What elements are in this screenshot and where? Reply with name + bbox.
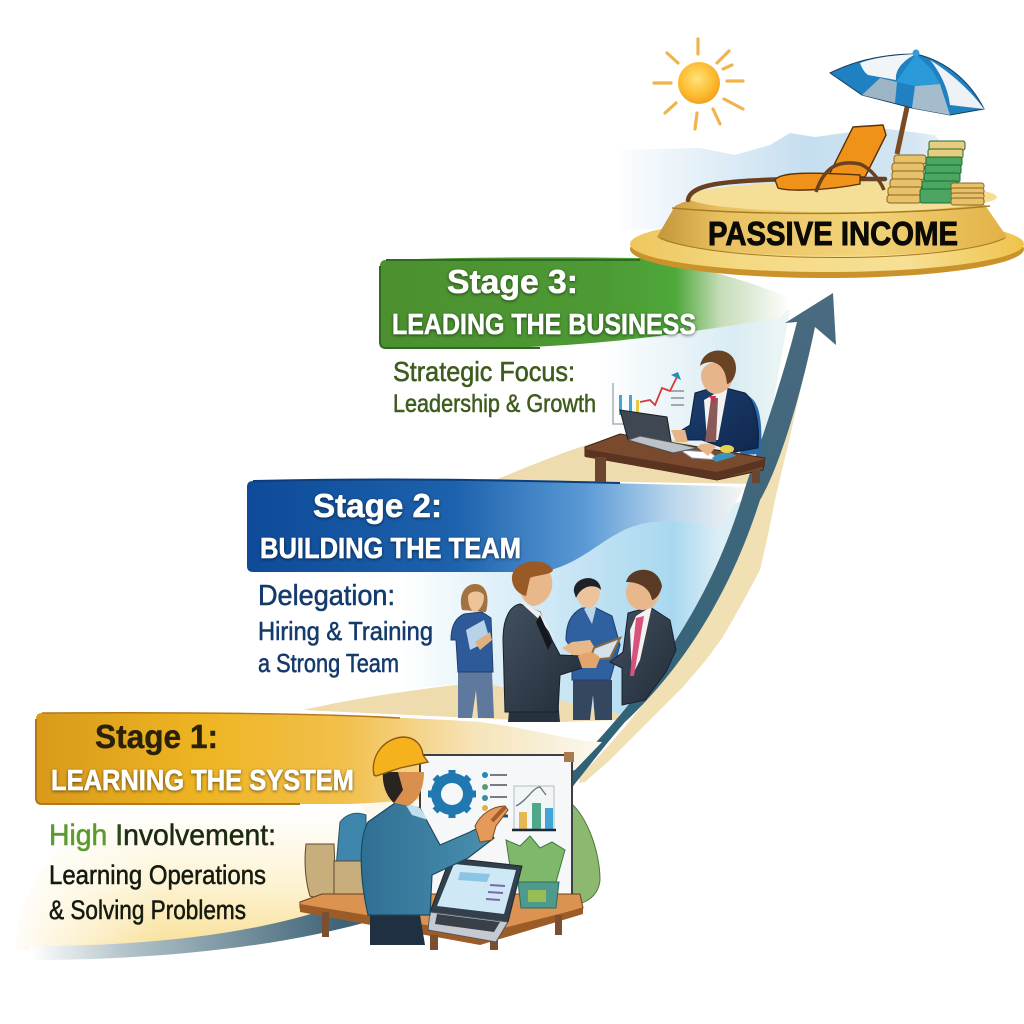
small coin stack (951, 183, 984, 205)
man body (671, 350, 758, 452)
lounge chair icon (688, 125, 886, 200)
woman (451, 584, 494, 718)
chair back (740, 395, 761, 455)
whiteboard (420, 752, 574, 907)
stage 3 banner (380, 257, 795, 348)
plant (506, 836, 565, 908)
growth chart (613, 372, 684, 424)
stage 3 scene: leader at desk (585, 350, 765, 483)
bag (305, 844, 336, 898)
man 3 (610, 570, 676, 705)
stage 3 subtitle: LEADING THE BUSINESS (392, 309, 696, 341)
box (334, 861, 368, 897)
bush (566, 800, 600, 905)
stage 3 title: Stage 3: (447, 263, 578, 300)
stage 2 focus heading: Delegation: (258, 580, 395, 612)
stage 1 banner (36, 713, 602, 804)
stage 1 focus heading: High Involvement: (49, 819, 276, 852)
sun icon (654, 39, 743, 129)
board chart (512, 786, 556, 830)
man 2 (562, 578, 620, 720)
stage 2 text block (258, 580, 433, 678)
passive income platform (630, 182, 1024, 278)
stage 2 scene: team (451, 561, 676, 722)
stage 2 title: Stage 2: (313, 487, 442, 524)
stage 3 detail line: Leadership & Growth (393, 390, 596, 418)
stage 2 detail line 2: a Strong Team (258, 648, 399, 678)
stage 1 scene: worker at whiteboard (300, 737, 600, 950)
stage 1 detail line 2: & Solving Problems (49, 895, 246, 925)
panel background: stage 3 sky (560, 310, 790, 470)
cash stack (920, 141, 965, 203)
stage 1 text block (49, 819, 276, 925)
checklist (482, 772, 508, 816)
desk (585, 434, 765, 483)
coin stack (887, 155, 926, 203)
stage 2 banner (247, 480, 745, 572)
papers and accessories (680, 444, 736, 462)
stage 1 subtitle: LEARNING THE SYSTEM (51, 765, 354, 797)
panel background: stage 2 sky (400, 500, 745, 715)
laptop (428, 858, 522, 942)
stage 2 detail line 1: Hiring & Training (258, 616, 433, 646)
stage 3 text block (393, 356, 596, 418)
stage 3 focus heading: Strategic Focus: (393, 356, 575, 387)
platform label: PASSIVE INCOME (708, 215, 958, 252)
panel background: stage 1 (10, 745, 600, 960)
growth arrow curve (30, 293, 836, 960)
umbrella icon (830, 50, 984, 154)
worker (361, 737, 508, 945)
gear icon (428, 770, 476, 818)
sand path (303, 381, 802, 785)
tablet (590, 638, 620, 660)
man 1 (503, 561, 600, 722)
desk (300, 894, 583, 950)
backpack (336, 813, 366, 868)
laptop (620, 410, 697, 453)
money stacks icon (887, 141, 984, 205)
stage 1 title: Stage 1: (95, 718, 218, 755)
stage 2 subtitle: BUILDING THE TEAM (260, 533, 521, 565)
stage 1 detail line 1: Learning Operations (49, 860, 266, 890)
platform background haze (620, 128, 965, 230)
